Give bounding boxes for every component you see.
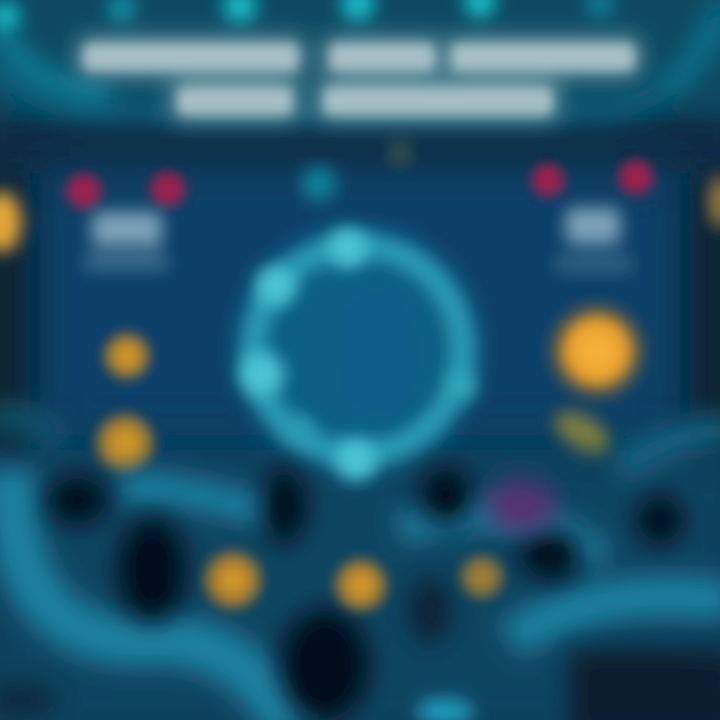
teal highlight: bottom centre <box>417 698 473 720</box>
left panel: red dots <box>67 172 185 208</box>
small top-centre marker <box>387 140 413 166</box>
top row of teal lights <box>0 0 613 30</box>
ring nodes <box>240 228 476 481</box>
teal swooping shapes <box>0 416 720 720</box>
amber coin: lower left <box>203 550 263 610</box>
amber coin: lower right <box>459 554 505 600</box>
right panel: red dots <box>532 160 653 196</box>
purple figure <box>485 480 557 532</box>
right edge amber light <box>710 176 720 228</box>
top arc band <box>0 0 720 112</box>
amber coin: large right <box>553 307 641 395</box>
amber coin: left upper <box>103 332 151 380</box>
lower crowd scene <box>0 403 720 720</box>
left label block (illegible) <box>84 212 168 270</box>
amber coin: left lower <box>95 413 155 473</box>
teal dot above ring <box>301 166 337 202</box>
central ring chart <box>236 228 480 481</box>
amber accent: right <box>548 403 616 461</box>
ring inner crescent <box>336 290 418 411</box>
title (illegible in reference) <box>78 38 640 120</box>
amber coin: lower centre <box>334 558 388 612</box>
dark silhouettes <box>0 467 720 720</box>
right label block (illegible) <box>556 208 632 272</box>
left edge amber light <box>0 192 21 252</box>
